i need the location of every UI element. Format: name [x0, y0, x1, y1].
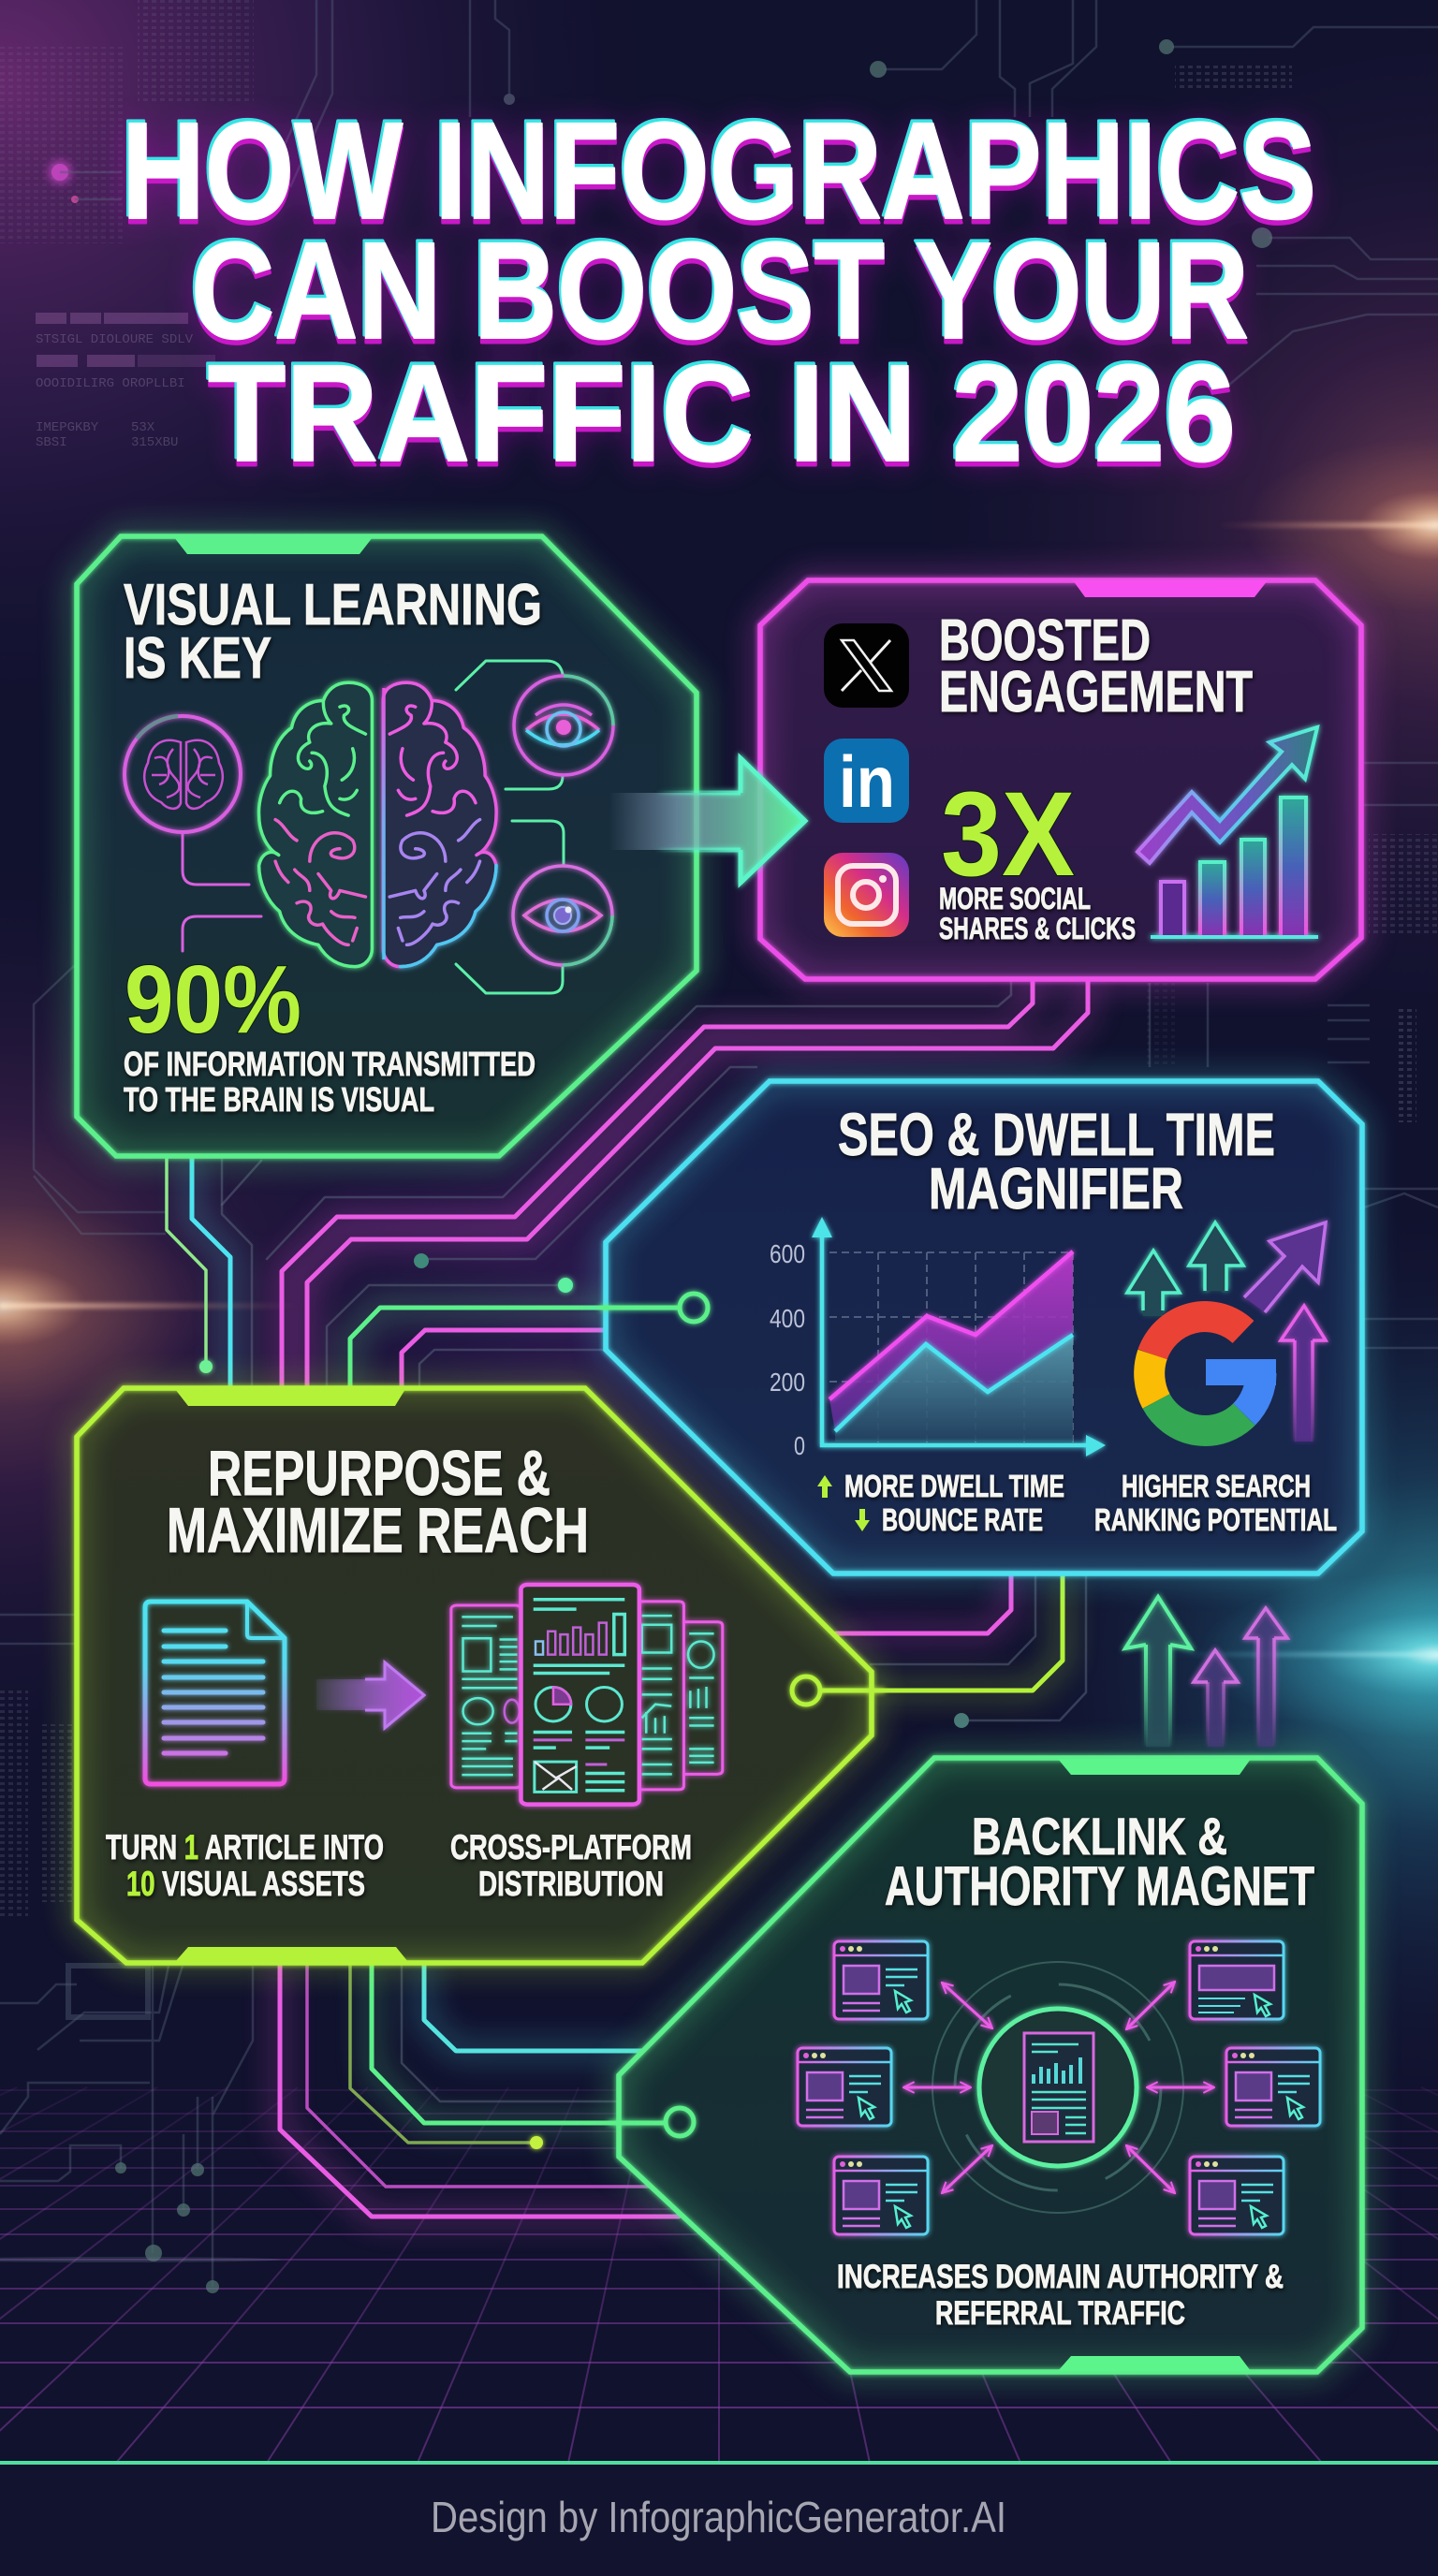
panel: visual learning: IS KEY: [124, 626, 271, 691]
heading: repurpose: REPURPOSE &: [208, 1438, 550, 1509]
icon: eye upper: [514, 676, 613, 775]
panel: backlink and authority magnet: AUTHORITY MAGNET: [885, 1856, 1314, 1917]
panel: visual learning: TO THE BRAIN IS VISUAL: [124, 1080, 434, 1119]
heading: SEO and dwell time: SEO & DWELL TIME: [838, 1101, 1275, 1168]
arrow: article to assets: [316, 1662, 424, 1728]
heading: boosted engagement: BOOSTED: [939, 608, 1151, 673]
icon: article document: [145, 1602, 285, 1784]
faint circuit traces and data texture: 53X: [131, 420, 155, 435]
text: dwell time bullets: [817, 1469, 1064, 1537]
connector node: green: [599, 1294, 708, 1322]
text: 90% description: OF INFORMATION TRANSMITTED: [124, 1045, 536, 1083]
heading: visual learning: VISUAL LEARNING: [124, 573, 542, 637]
icon: X logo: [824, 623, 909, 708]
stat: 3X: 3X: [941, 768, 1075, 901]
icon: small brain circle: [125, 716, 241, 832]
icon: Instagram logo: [824, 853, 909, 937]
panel: repurpose and maximize reach: MAXIMIZE REACH: [167, 1495, 589, 1566]
icon: large brain: [259, 682, 496, 967]
panel: SEO and dwell time: [599, 1081, 1362, 1573]
text: backlink description: INCREASES DOMAIN AUTHORITY &: [837, 2259, 1284, 2295]
title: TRAFFIC IN 2026: [208, 337, 1236, 490]
text: cross-platform: DISTRIBUTION: [478, 1865, 664, 1903]
text: dwell time bullets: MORE DWELL TIME: [844, 1469, 1064, 1503]
title: CAN BOOST YOUR: [191, 217, 1249, 371]
title: TRAFFIC IN 2026: [208, 340, 1236, 493]
faint circuit traces and data texture: OOOIDILIRG OROPLLBI: [36, 376, 185, 391]
panel: visual learning: [77, 536, 697, 1156]
connector traces: [167, 979, 1088, 2217]
callout lines: [183, 661, 564, 993]
panel: boosted engagement: [760, 580, 1361, 979]
panel: boosted engagement: SHARES & CLICKS: [939, 912, 1136, 945]
footer: Design by InfographicGenerator.AI: [431, 2493, 1006, 2541]
chart: dwell time area chart: 200: [770, 1368, 805, 1397]
panel: backlink and authority magnet: [609, 1758, 1362, 2372]
text: cross-platform: [450, 1828, 692, 1903]
lens flares: [0, 436, 1438, 1739]
text: search ranking: RANKING POTENTIAL: [1094, 1502, 1337, 1537]
text: turn 1 article: TURN 1 ARTICLE INTO: [106, 1828, 384, 1866]
title: TRAFFIC IN 2026: [208, 342, 1236, 495]
stat: 90%: 90%: [125, 945, 301, 1053]
perspective grid floor: [0, 2087, 1438, 2463]
icon: ranking arrows: [1127, 1222, 1326, 1442]
connector node: lime: [792, 1676, 885, 1705]
connector end dots: [199, 1278, 573, 2149]
arrows: rising between SEO and backlink panels: [1125, 1597, 1287, 1747]
text: search ranking: [1094, 1469, 1337, 1537]
title: [120, 92, 1316, 495]
icon: Google G: [1150, 1317, 1276, 1430]
chart: dwell time area chart: 0: [794, 1431, 805, 1460]
heading: backlink: BACKLINK &: [972, 1807, 1227, 1866]
faint circuit traces and data texture: STSIGL DIOLOURE SDLV: [36, 332, 194, 347]
title: CAN BOOST YOUR: [191, 214, 1249, 368]
diagram: link arrows: [903, 1982, 1214, 2193]
diagram: referring sites: [798, 1941, 1320, 2234]
title: TRAFFIC IN 2026: [206, 334, 1234, 488]
text: dwell time bullets: BOUNCE RATE: [882, 1502, 1043, 1537]
footer: [0, 2461, 1438, 2576]
chart: dwell time area chart: 400: [770, 1304, 805, 1333]
title: CAN BOOST YOUR: [189, 212, 1247, 365]
faint circuit traces and data texture: 315XBU: [131, 435, 178, 450]
text: turn 1 article: 10 VISUAL ASSETS: [126, 1865, 365, 1903]
text: cross-platform: CROSS-PLATFORM: [450, 1828, 692, 1866]
text: backlink description: [837, 2259, 1284, 2332]
text: search ranking: HIGHER SEARCH: [1122, 1469, 1311, 1503]
chart: dwell time area chart: 600: [770, 1239, 805, 1268]
text: backlink description: REFERRAL TRAFFIC: [935, 2295, 1185, 2332]
chart: dwell time area chart: [770, 1217, 1106, 1460]
chart: rising bars with arrow: [1137, 727, 1318, 937]
connector node: green: [609, 2108, 694, 2136]
panel: SEO and dwell time: MAGNIFIER: [929, 1157, 1183, 1222]
text: turn 1 article: [106, 1828, 384, 1903]
arrow: visual learning to engagement: [609, 758, 805, 883]
title: CAN BOOST YOUR: [191, 219, 1249, 373]
panel: repurpose and maximize reach: [77, 1388, 885, 1963]
faint circuit traces and data texture: IMEPGKBY: [36, 420, 99, 435]
icon: stacked visual assets: [451, 1585, 723, 1805]
panel: boosted engagement: ENGAGEMENT: [939, 660, 1253, 724]
diagram: central hub: [932, 1962, 1183, 2213]
text: 3X description: MORE SOCIAL: [939, 882, 1091, 915]
icon: LinkedIn logo: in: [839, 740, 895, 823]
faint circuit traces and data texture: SBSI: [36, 435, 67, 450]
icon: eye lower: [513, 866, 612, 965]
